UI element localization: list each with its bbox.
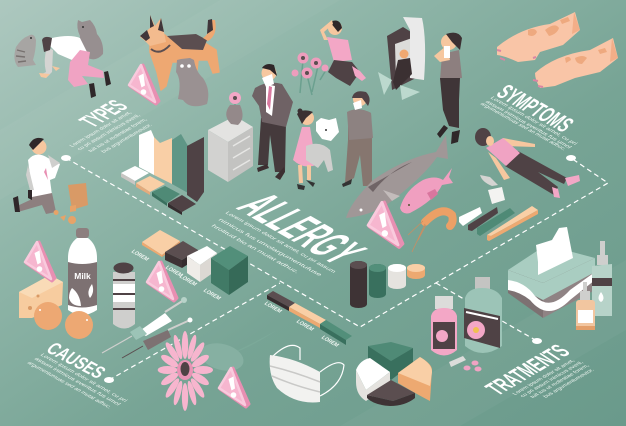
icon: shrimp — [408, 211, 453, 252]
icon: syringe one — [102, 297, 187, 353]
labels: lorem row one: LOREM — [202, 288, 222, 301]
icon: grey tuna — [346, 135, 448, 218]
text block: treatments: Lorem ipsum dolor sit amet, — [512, 359, 577, 396]
icon: shoe and pouch — [480, 175, 505, 204]
icon: rash hand right — [533, 38, 618, 88]
icon: rash hand left — [497, 12, 580, 62]
icon: warning triangle bottom — [219, 368, 249, 407]
icon: milk bottle: Milk — [74, 271, 91, 281]
text block: allergy: hrolitud bio an mutat adhuc. — [209, 224, 301, 275]
panel: food allergens centre — [346, 135, 538, 252]
icon: oranges — [34, 302, 93, 339]
icon: pink fish — [400, 168, 453, 213]
labels: lorem row one: LOREM — [130, 249, 150, 262]
text block: treatments: bus argumentumeutor. — [542, 368, 596, 399]
heading: types: TYPES — [73, 96, 134, 131]
icon: pink gerbera — [158, 330, 277, 411]
icon: warning triangle top — [129, 65, 159, 104]
text block: types: bus argumentumeutor. — [100, 123, 154, 154]
icon: cheese — [19, 275, 63, 318]
icon: grey cat front — [176, 58, 208, 106]
icon: striped cat — [14, 35, 36, 67]
icon: framed mirror — [378, 17, 425, 100]
icon: grey dresser — [208, 116, 253, 182]
icon: pills — [449, 356, 482, 372]
text block: types — [69, 111, 154, 154]
labels: lorem row one — [130, 249, 222, 301]
labels: lorem row two: LOREM — [295, 319, 315, 332]
icon: syringe two — [122, 318, 192, 358]
chart: cylinders — [350, 261, 425, 308]
figure: girl with white dog — [293, 108, 339, 190]
labels: lorem row two: LOREM — [263, 301, 283, 314]
icon: face mask — [270, 345, 344, 402]
panel: causes illustrations — [13, 138, 277, 411]
figure: woman holding head — [320, 20, 366, 86]
icon: orange dropper bottle — [576, 282, 595, 330]
icon: milk bottle — [68, 228, 97, 315]
labels: lorem row one: LOREM — [178, 274, 198, 287]
icon: pink bottle — [431, 296, 457, 356]
figure: woman with tissue — [342, 91, 373, 187]
labels: lorem row one: LOREM — [164, 265, 184, 278]
panel: symptoms illustrations — [475, 12, 618, 204]
text block: allergy: Lorem ipsum dolor sit amet, cu pri assum — [223, 211, 337, 274]
text block: symptoms: assum inimicus everitus fus umol — [483, 100, 572, 150]
icon: green bottle — [464, 277, 502, 353]
text block: causes: assum inimicus everitus fus umol — [32, 357, 121, 407]
text block: symptoms: argumentumuas sed an mutat adhuc. — [478, 102, 568, 152]
text block: symptoms: Lorem ipsum dolor sit amet, cu pri — [488, 96, 578, 146]
icon: pink flowers — [292, 52, 328, 95]
icon: tissue box — [508, 227, 595, 318]
text block: treatments: cu pri assum inimicus everti, — [519, 360, 585, 399]
text block: treatments: tuit ius ut molestiae forem, — [529, 363, 591, 399]
text block: types: Lorem ipsum dolor sit amet, — [69, 111, 134, 148]
panel: types illustrations — [14, 15, 219, 106]
icon: warning triangle centre — [368, 202, 403, 247]
figure: man on all fours — [39, 36, 111, 98]
heading: treatments: TRATMENTS — [480, 341, 576, 399]
icon: grey cat — [77, 20, 103, 59]
icon: vase and flower — [226, 92, 243, 125]
heading: causes: CAUSES — [42, 338, 110, 382]
figure: man in suit sneezing — [252, 64, 293, 180]
panel: treatments illustrations — [431, 227, 612, 372]
dashed connector lines — [61, 155, 608, 383]
heading: symptoms: SYMPTOMS — [491, 80, 579, 137]
chart: isometric sticks — [267, 291, 352, 345]
labels: lorem row two: LOREM — [320, 335, 340, 348]
icon: paper bag and nuts — [54, 183, 88, 224]
icon: warning triangle left — [25, 242, 55, 281]
icon: colored sticks — [459, 206, 538, 241]
figure: lying woman — [475, 128, 580, 198]
text block: allergy — [209, 211, 337, 277]
text block: types: tuit ius ut molestiae forem, — [87, 117, 149, 153]
chart: isometric blocks — [142, 230, 248, 295]
icon: tall dropper bottle — [592, 241, 612, 316]
chart: pie chart — [356, 342, 432, 406]
icon: vial — [113, 262, 135, 328]
icon: dog — [140, 15, 219, 90]
icon: warning triangle mid — [147, 262, 177, 301]
text block: allergy: nimicus fus umolargumentufuse — [216, 218, 323, 277]
text block: causes: Lorem ipsum dolor sit amet, cu pri — [38, 353, 128, 403]
text block: causes: argumentumuas sed an mutat adhuc. — [25, 361, 113, 410]
bar chart: types — [121, 130, 204, 215]
heading: allergy: ALLERGY — [224, 187, 378, 271]
figure: woman with bun — [434, 33, 462, 144]
labels: lorem row two — [263, 301, 340, 348]
figure: kneeling man — [13, 138, 60, 214]
text block: types: cu pri assum inimicus everti, — [76, 113, 142, 152]
